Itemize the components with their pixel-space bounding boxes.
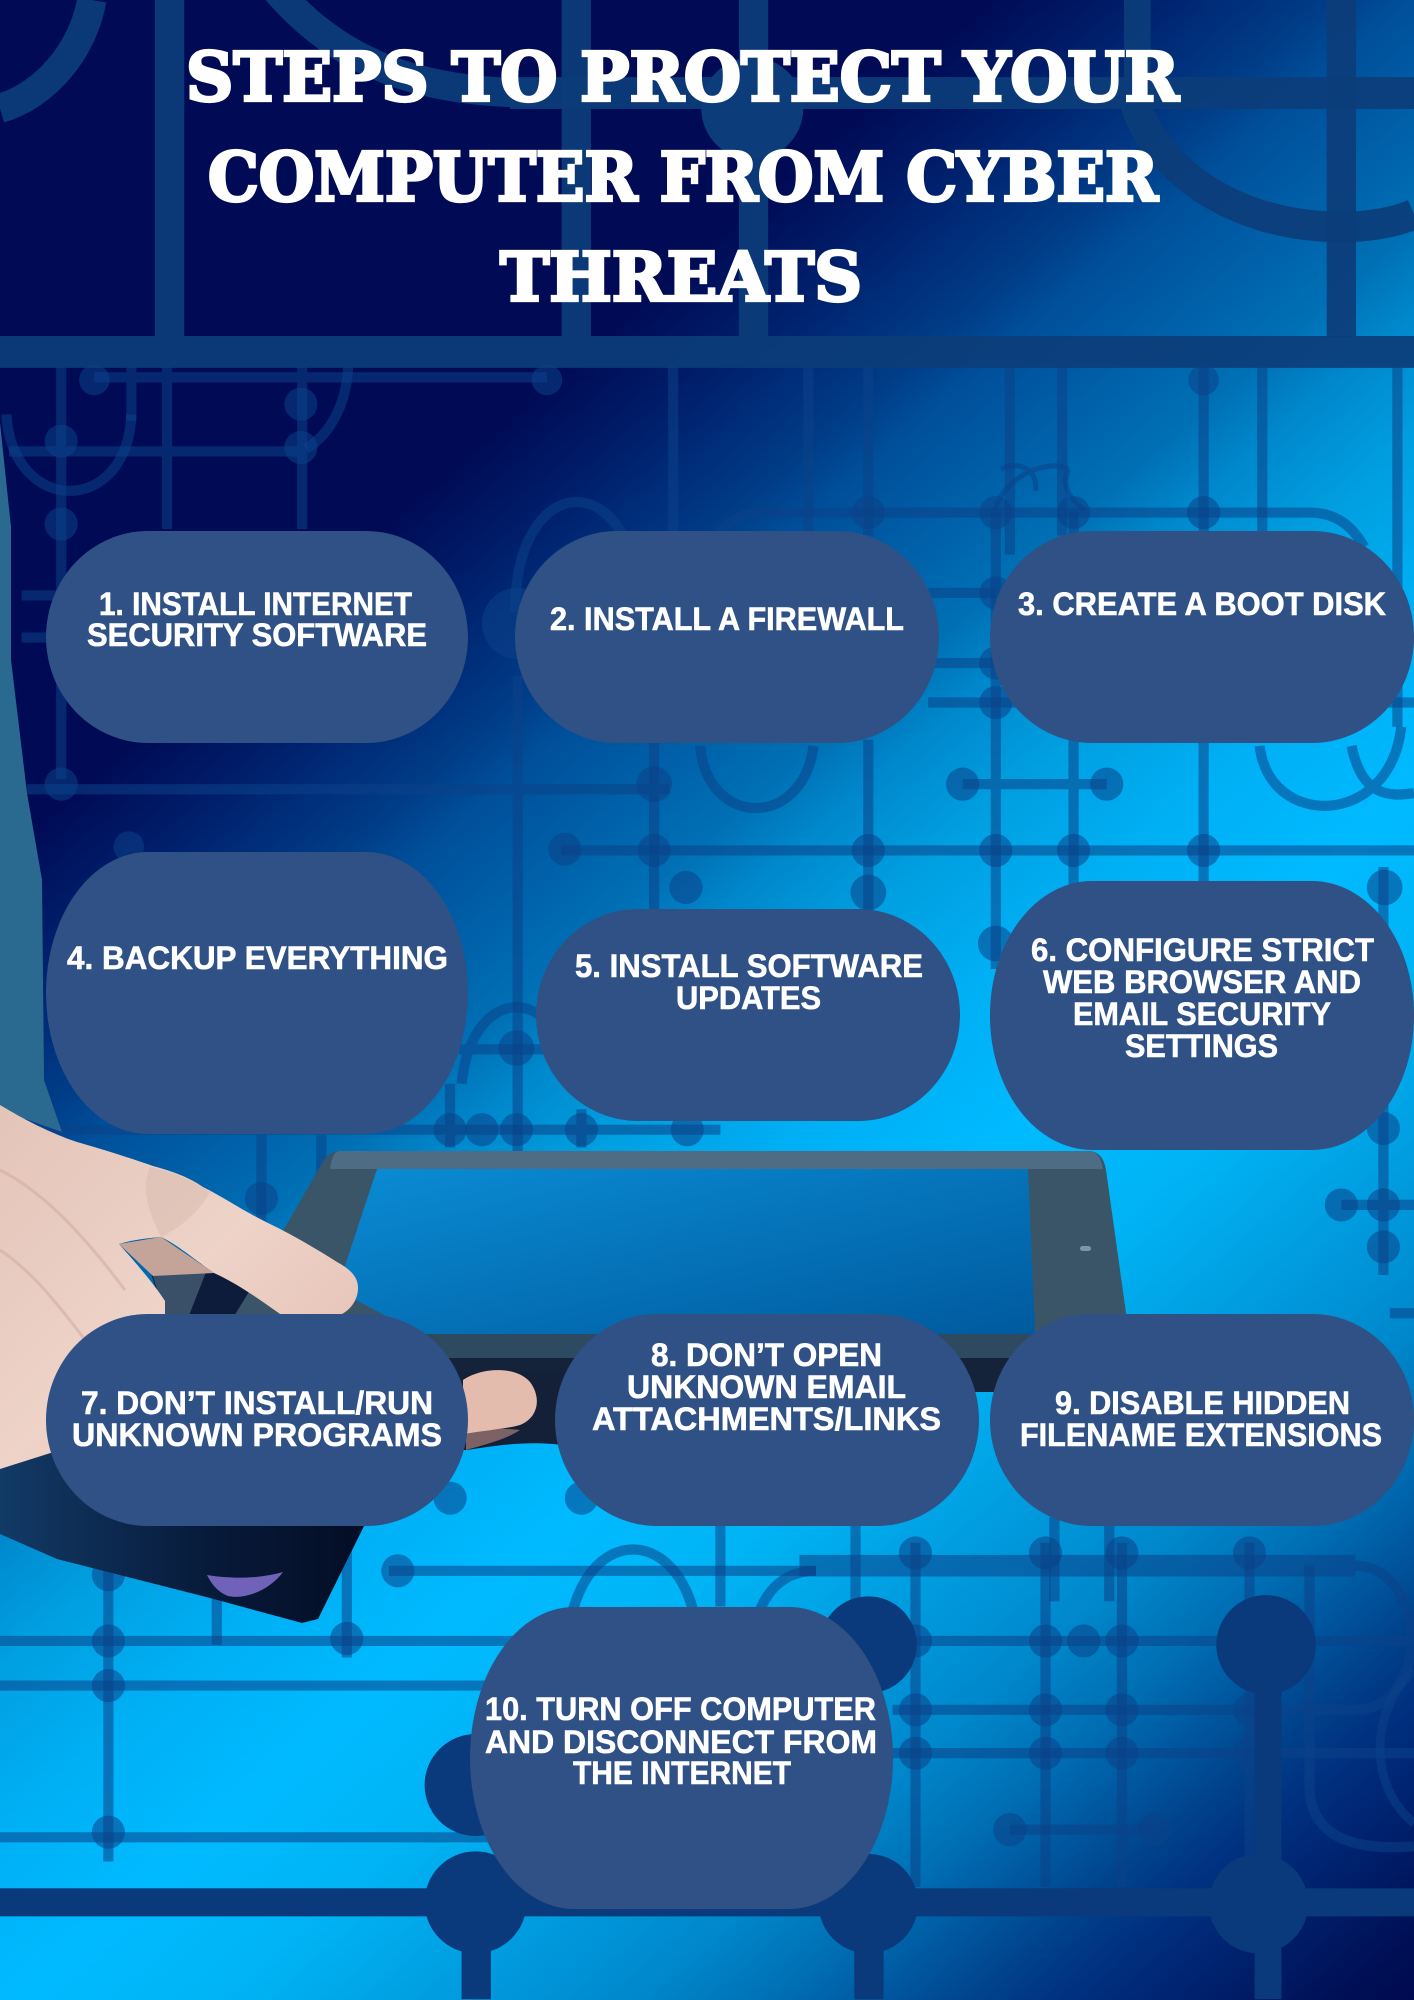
step 6 pill: EMAIL SECURITY [1073,996,1331,1032]
step 5 pill: 5. INSTALL SOFTWARE [575,948,923,984]
thumb and palm under tablet [440,1370,570,1450]
step 8 pill: UNKNOWN EMAIL [627,1369,906,1405]
step 8 pill: 8. DON’T OPEN [651,1337,882,1373]
step 1 pill: 1. INSTALL INTERNET [99,586,412,622]
jacket sleeve end [0,1440,380,1623]
step 2 pill: 2. INSTALL A FIREWALL [550,601,904,637]
step 10 pill [470,1607,893,1909]
step 4 pill [46,852,468,1134]
step 6 pill [990,881,1414,1150]
step 7 pill: UNKNOWN PROGRAMS [72,1417,442,1453]
step 1 pill [46,531,468,743]
step 9 pill [990,1314,1414,1526]
step 3 pill [990,531,1414,743]
step 2 pill [515,531,939,743]
step 8 pill [555,1314,979,1526]
step 6 pill: 6. CONFIGURE STRICT [1031,932,1374,968]
step 6 pill: WEB BROWSER AND [1043,964,1361,1000]
title: STEPS TO PROTECT YOUR [186,38,1180,116]
step 9 pill: FILENAME EXTENSIONS [1020,1417,1382,1453]
step 8 pill: ATTACHMENTS/LINKS [592,1401,941,1437]
step 10 pill: THE INTERNET [573,1755,791,1791]
tablet [233,1151,1127,1392]
step 9 pill: 9. DISABLE HIDDEN [1055,1385,1350,1421]
gap between fingers [119,1237,250,1318]
step 10 pill: AND DISCONNECT FROM [485,1724,877,1760]
title: COMPUTER FROM CYBER [208,138,1159,216]
step 6 pill: SETTINGS [1125,1028,1278,1064]
step 10 pill: 10. TURN OFF COMPUTER [485,1691,876,1727]
title [186,38,1180,316]
pointing hand [0,1105,358,1469]
person and tablet photo [0,423,1127,1623]
step 7 pill: 7. DON’T INSTALL/RUN [81,1385,433,1421]
suit sleeve [0,423,62,1132]
step 7 pill [46,1314,468,1526]
step 1 pill: SECURITY SOFTWARE [87,617,427,653]
step 4 pill: 4. BACKUP EVERYTHING [67,940,448,976]
title: THREATS [500,238,862,316]
step 5 pill: UPDATES [676,980,821,1016]
step 5 pill [536,909,960,1121]
step 3 pill: 3. CREATE A BOOT DISK [1018,586,1386,622]
